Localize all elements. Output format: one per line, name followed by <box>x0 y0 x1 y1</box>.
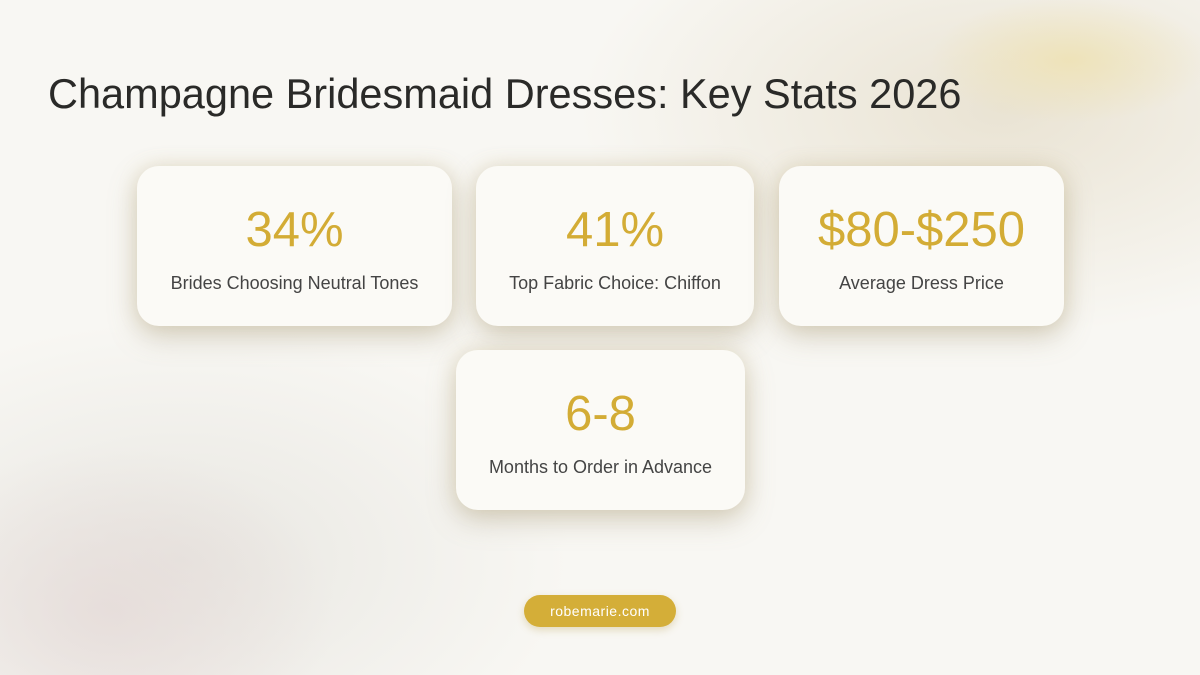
stat number: 34% <box>245 203 344 257</box>
stat label: Brides Choosing Neutral Tones <box>171 273 418 293</box>
stat number: $80-$250 <box>818 203 1025 257</box>
card: months <box>456 350 745 510</box>
stat label: Top Fabric Choice: Chiffon <box>509 273 721 293</box>
card: price <box>779 166 1064 326</box>
title: Champagne Bridesmaid Dresses: Key Stats 2026 <box>48 70 961 117</box>
stat label: Months to Order in Advance <box>489 457 712 477</box>
stat label: Average Dress Price <box>839 273 1004 293</box>
source button: robemarie.com <box>550 603 650 619</box>
source button <box>524 595 676 627</box>
stat number: 41% <box>566 203 664 257</box>
stat number: 6-8 <box>565 387 636 441</box>
card: fabric <box>476 166 754 326</box>
card: neutral tones <box>137 166 452 326</box>
